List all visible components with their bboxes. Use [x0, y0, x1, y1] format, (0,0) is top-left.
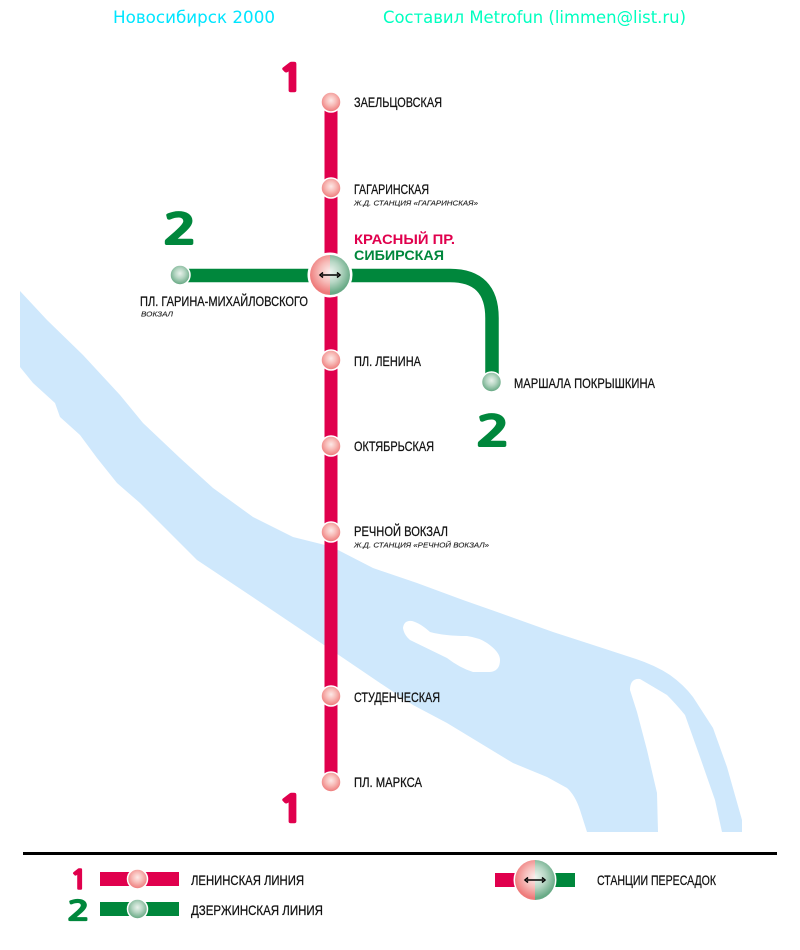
station: Пл. Маркса: ПЛ. МАРКСА: [354, 774, 423, 790]
label: Красный пр.: КРАСНЫЙ ПР.: [354, 230, 455, 247]
station: Гагаринская: [321, 178, 478, 208]
line number 2 east: 2: [476, 413, 510, 453]
station: Маршала Покрышкина: [482, 372, 656, 392]
river with islands: [20, 291, 742, 832]
interchange station: Красный проспект / Сибирская: [308, 252, 352, 298]
station: Заельцовская: ЗАЕЛЬЦОВСКАЯ: [354, 94, 442, 110]
legend: line 1: 1: [70, 867, 88, 893]
label: Сибирская: СИБИРСКАЯ: [354, 247, 444, 263]
legend: line 2: 2: [67, 898, 90, 926]
legend: line 2: [67, 898, 323, 926]
legend: line 1: ЛЕНИНСКАЯ ЛИНИЯ: [191, 872, 304, 888]
line number 1 bottom: 1: [278, 791, 305, 828]
line 2: green line west and curved branch east: [180, 276, 492, 382]
station: Гагаринская: Ж.Д. СТАНЦИЯ «ГАГАРИНСКАЯ»: [353, 200, 478, 208]
line 1: red vertical line: [324, 102, 338, 782]
station: Речной вокзал: Ж.Д. СТАНЦИЯ «РЕЧНОЙ ВОКЗАЛ»: [353, 540, 489, 550]
station: Студенческая: СТУДЕНЧЕСКАЯ: [354, 689, 440, 705]
station: Речной вокзал: РЕЧНОЙ ВОКЗАЛ: [354, 522, 448, 539]
station: Пл. Гарина-Михайловского: [140, 265, 308, 318]
author credit: Составил Metrofun (limmen@list.ru): [383, 8, 686, 28]
legend: interchange stations: [495, 858, 717, 902]
line number 2 west: 2: [163, 211, 197, 251]
station: Пл. Гарина-Михайловского: ВОКЗАЛ: [141, 312, 173, 318]
legend divider: [23, 852, 777, 855]
station: Пл. Маркса: [321, 772, 423, 792]
station: Речной вокзал: [321, 522, 489, 550]
station: Маршала Покрышкина: МАРШАЛА ПОКРЫШКИНА: [514, 375, 656, 391]
station: Октябрьская: [321, 436, 434, 456]
legend: interchange stations: СТАНЦИИ ПЕРЕСАДОК: [597, 872, 717, 888]
station: Гагаринская: ГАГАРИНСКАЯ: [354, 181, 429, 197]
legend: line 2: ДЗЕРЖИНСКАЯ ЛИНИЯ: [191, 902, 323, 918]
station: Пл. Ленина: [321, 350, 422, 370]
station: Студенческая: [321, 686, 440, 706]
station: Октябрьская: ОКТЯБРЬСКАЯ: [354, 438, 434, 454]
station: Пл. Гарина-Михайловского: ПЛ. ГАРИНА-МИХАЙЛОВСКОГО: [140, 292, 308, 309]
line number 1 top: 1: [278, 60, 305, 97]
title: city and year: Новосибирск 2000: [113, 8, 275, 28]
station: Заельцовская: [321, 92, 442, 112]
legend: line 1: [70, 867, 304, 893]
station: Пл. Ленина: ПЛ. ЛЕНИНА: [354, 353, 422, 369]
